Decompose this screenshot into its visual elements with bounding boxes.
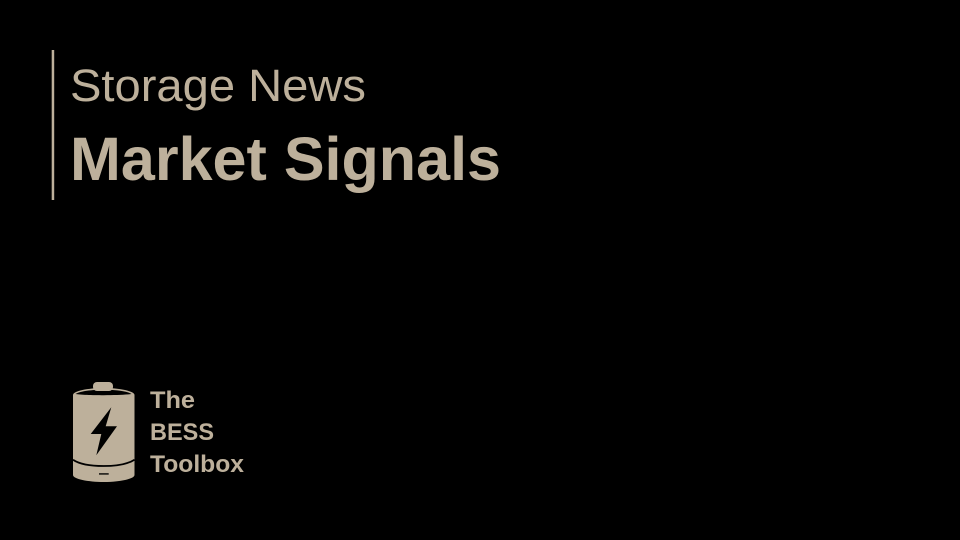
logo text: The <box>150 387 195 414</box>
logo text: BESS <box>150 419 214 446</box>
logo: The BESS Toolbox <box>73 382 245 482</box>
title block <box>52 50 501 200</box>
accent bar <box>52 50 54 200</box>
heading: Market Signals: Market Signals <box>70 125 501 193</box>
icon: battery with lightning bolt <box>73 382 134 482</box>
logo text: Toolbox <box>150 451 245 478</box>
logo text <box>150 387 245 478</box>
subtitle: Storage News: Storage News <box>70 60 366 111</box>
